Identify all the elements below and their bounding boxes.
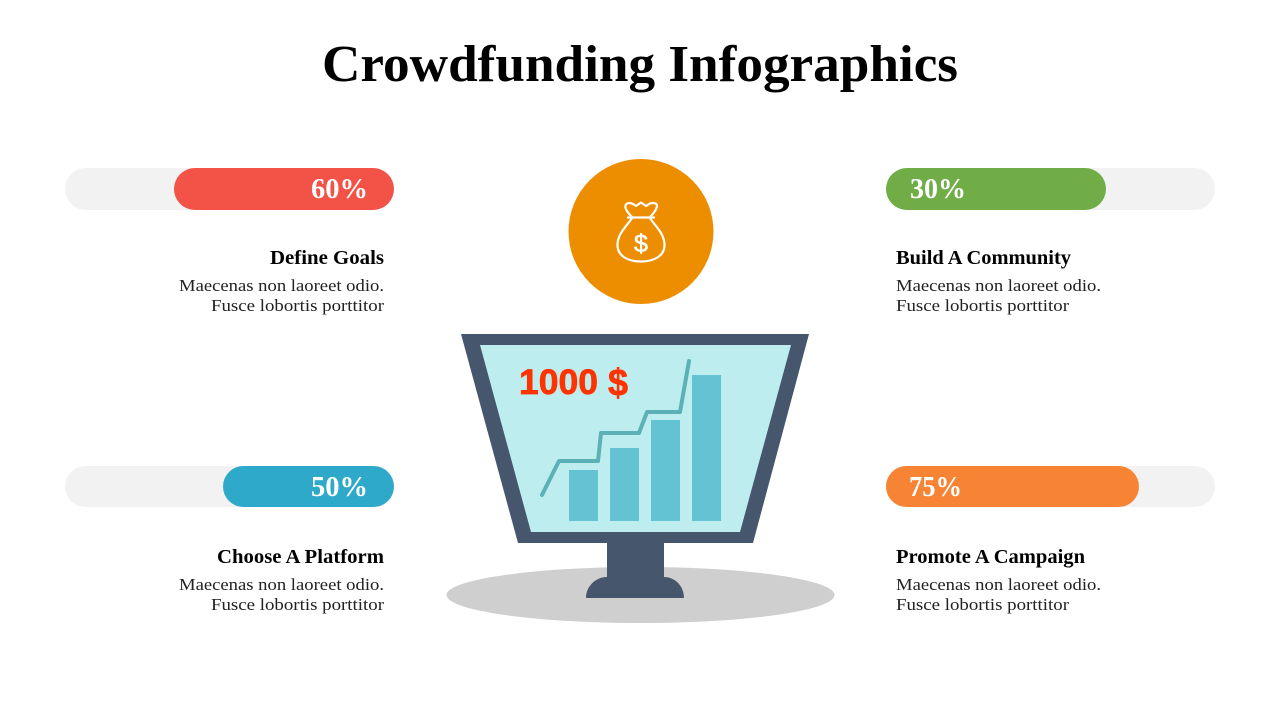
icon: money bag in orange circle: $ [634,230,648,258]
text block: choose a platform description: Maecenas non laoreet odio. [179,575,384,594]
monitor stand [586,543,684,598]
title: Crowdfunding Infographics [322,36,958,93]
text block: promote a campaign description: Fusce lobortis porttitor [896,595,1070,614]
bar chart [569,375,721,521]
text block: build a community description: Maecenas non laoreet odio. [896,276,1101,295]
progress bar: 75% [886,466,1215,507]
monitor frame [461,334,809,543]
panel: build a community [886,168,1215,315]
progress bar: 60%: 60% [311,174,368,205]
text block: build a community description: Fusce lobortis porttitor [896,296,1070,315]
heading: choose a platform: Choose A Platform [217,546,384,568]
heading: define goals: Define Goals [270,247,384,269]
trend line [542,361,689,495]
illustration: monitor with growth chart [446,334,834,623]
text block: build a community description [896,276,1101,315]
heading: promote a campaign: Promote A Campaign [896,546,1085,568]
panel: promote a campaign [886,466,1215,614]
icon: money bag in orange circle [568,159,714,304]
text block: define goals description: Fusce lobortis porttitor [211,296,385,315]
panel: choose a platform [65,466,394,614]
amount label: $ [608,362,628,404]
progress bar: 50%: 50% [311,472,368,503]
text block: choose a platform description: Fusce lobortis porttitor [211,595,385,614]
progress bar: 60% [65,168,394,210]
progress bar: 50% [65,466,394,507]
text block: promote a campaign description: Maecenas non laoreet odio. [896,575,1101,594]
monitor screen [480,345,791,532]
text block: choose a platform description [179,575,385,614]
text block: define goals description: Maecenas non laoreet odio. [179,276,384,295]
amount label: 1000 [519,363,598,402]
text block: promote a campaign description [896,575,1101,614]
progress bar: 30% [886,168,1215,210]
progress bar: 75%: 75% [909,472,962,503]
heading: build a community: Build A Community [896,247,1071,269]
text block: define goals description [179,276,385,315]
panel: define goals [65,168,394,315]
monitor shadow [446,567,834,623]
progress bar: 30%: 30% [910,174,966,205]
